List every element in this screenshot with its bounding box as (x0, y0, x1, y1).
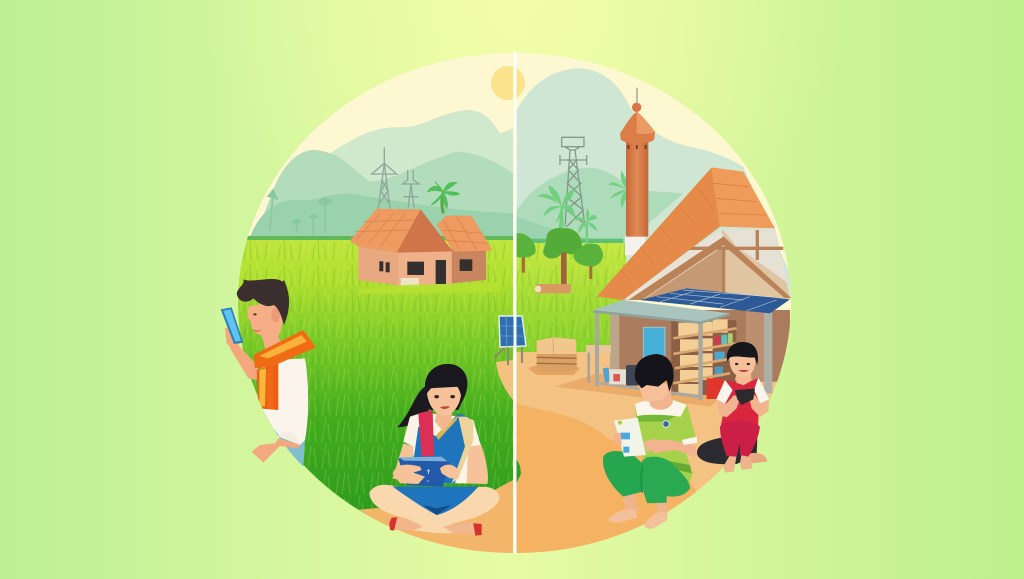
torso clipped by circle (257, 358, 308, 467)
illustration: man with phone (221, 279, 316, 467)
arms (717, 395, 740, 417)
small house (350, 209, 493, 287)
face (730, 356, 755, 377)
legs (369, 485, 499, 533)
illustration: woman with tablet: ✝ (426, 468, 431, 476)
pants (641, 457, 690, 503)
scarf (253, 330, 316, 368)
shed (555, 288, 790, 407)
tablet (735, 389, 755, 405)
mountains (243, 110, 513, 250)
raised arm (225, 333, 258, 380)
neck and collar (735, 373, 752, 385)
sun (491, 66, 513, 100)
hair (237, 279, 289, 325)
panel: rural left half (230, 50, 525, 555)
hair (635, 354, 674, 392)
pylons and palm (372, 147, 459, 213)
tablet (398, 457, 450, 487)
feet (392, 518, 423, 530)
illustration: rural scene details (350, 147, 500, 294)
illustration: girl on right with tablet (697, 342, 769, 473)
eye (253, 313, 257, 315)
sky (515, 50, 795, 350)
legs (622, 493, 638, 517)
green sliver (516, 458, 521, 484)
neck and face (650, 387, 673, 410)
phone hand (225, 325, 242, 350)
collar (635, 400, 687, 417)
illustration: boy with paper (603, 354, 697, 529)
hands (393, 465, 425, 484)
hands (613, 433, 622, 445)
sky (230, 50, 514, 250)
skirt (393, 487, 478, 515)
shelves (671, 320, 736, 395)
mid mountain (516, 168, 683, 243)
neck and face (435, 410, 452, 432)
supplies (603, 367, 610, 383)
walls (610, 310, 790, 382)
ear (271, 308, 280, 322)
arms (393, 443, 415, 482)
palms (537, 171, 627, 247)
paper (614, 418, 646, 457)
canopy (593, 300, 730, 322)
arm (652, 440, 697, 457)
field (230, 240, 514, 530)
foot (750, 453, 767, 463)
illustration: woman with tablet (369, 364, 499, 536)
dirt light (516, 352, 796, 562)
solar roof (640, 288, 790, 313)
dark trousers and knees (697, 437, 757, 464)
icon: solar panel (494, 316, 526, 365)
dirt path by solar (496, 360, 513, 400)
palm behind minaret (609, 171, 627, 208)
face (247, 300, 283, 355)
sun edge (516, 68, 525, 98)
panel: village right half (516, 53, 791, 553)
red legs (720, 420, 760, 457)
phone (221, 307, 243, 344)
lower arm and hand (252, 438, 301, 463)
trees (516, 228, 603, 284)
logs (536, 284, 571, 293)
dirt dark (516, 403, 700, 560)
telecom tower and trees (517, 88, 792, 300)
hair fringe (425, 364, 466, 402)
big house roof (597, 167, 720, 300)
eyes and mouth (434, 395, 439, 398)
big house gable (623, 228, 790, 300)
divider (514, 52, 516, 554)
grass tuft in front of house (360, 282, 500, 294)
blouse and saree (403, 413, 481, 483)
icon: cardboard boxes on pallet (528, 337, 580, 375)
minaret (620, 88, 655, 255)
field (516, 243, 626, 355)
back mountain (517, 68, 800, 297)
red torso (721, 377, 759, 427)
illustration: woman with tablet: ≈ (427, 479, 430, 484)
door (643, 327, 665, 357)
sleeves (716, 380, 733, 404)
feet (608, 509, 637, 523)
ponytail (397, 385, 432, 427)
canopy posts (595, 312, 599, 387)
hair (727, 342, 758, 365)
hair back (425, 364, 467, 410)
torso (635, 404, 697, 493)
dirt path bottom (355, 480, 513, 555)
